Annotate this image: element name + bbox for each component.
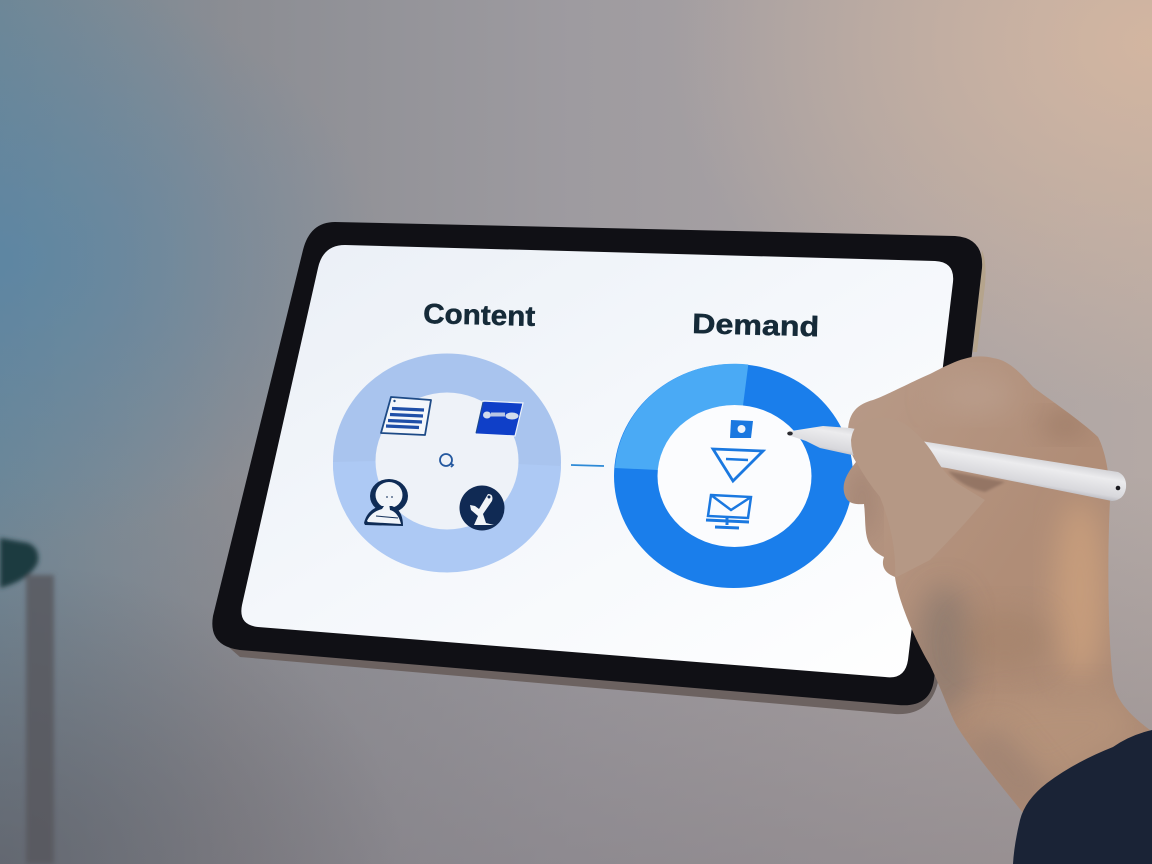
connector line — [571, 465, 604, 466]
icon: document — [381, 397, 431, 435]
tablet right edge highlight — [973, 250, 986, 352]
content ring chart — [333, 354, 561, 572]
tablet screen — [241, 245, 953, 677]
thumb — [851, 418, 985, 578]
tablet rim — [216, 636, 940, 714]
demand ring chart — [614, 364, 853, 588]
blurred stool at left — [0, 538, 54, 864]
icon: blue card — [475, 401, 523, 436]
stylus end dot — [1116, 486, 1120, 490]
stylus — [787, 426, 1126, 501]
finger shadow under stylus — [948, 471, 1005, 492]
icon: centre loop — [440, 454, 453, 467]
tablet — [212, 222, 986, 714]
heading: Content: Content — [423, 298, 536, 332]
stylus tip — [787, 432, 793, 436]
icon: mail monitor — [706, 495, 751, 528]
icon: dark badge — [460, 486, 504, 530]
icon: funnel triangle — [713, 449, 763, 481]
icon: square dot — [730, 420, 753, 438]
sleeve — [1013, 730, 1152, 864]
stylus body — [791, 426, 1126, 501]
hand shading — [844, 389, 1109, 804]
tablet body — [212, 222, 982, 705]
hand — [844, 356, 1150, 815]
icon: person — [364, 479, 408, 526]
heading: Demand: Demand — [692, 308, 820, 342]
